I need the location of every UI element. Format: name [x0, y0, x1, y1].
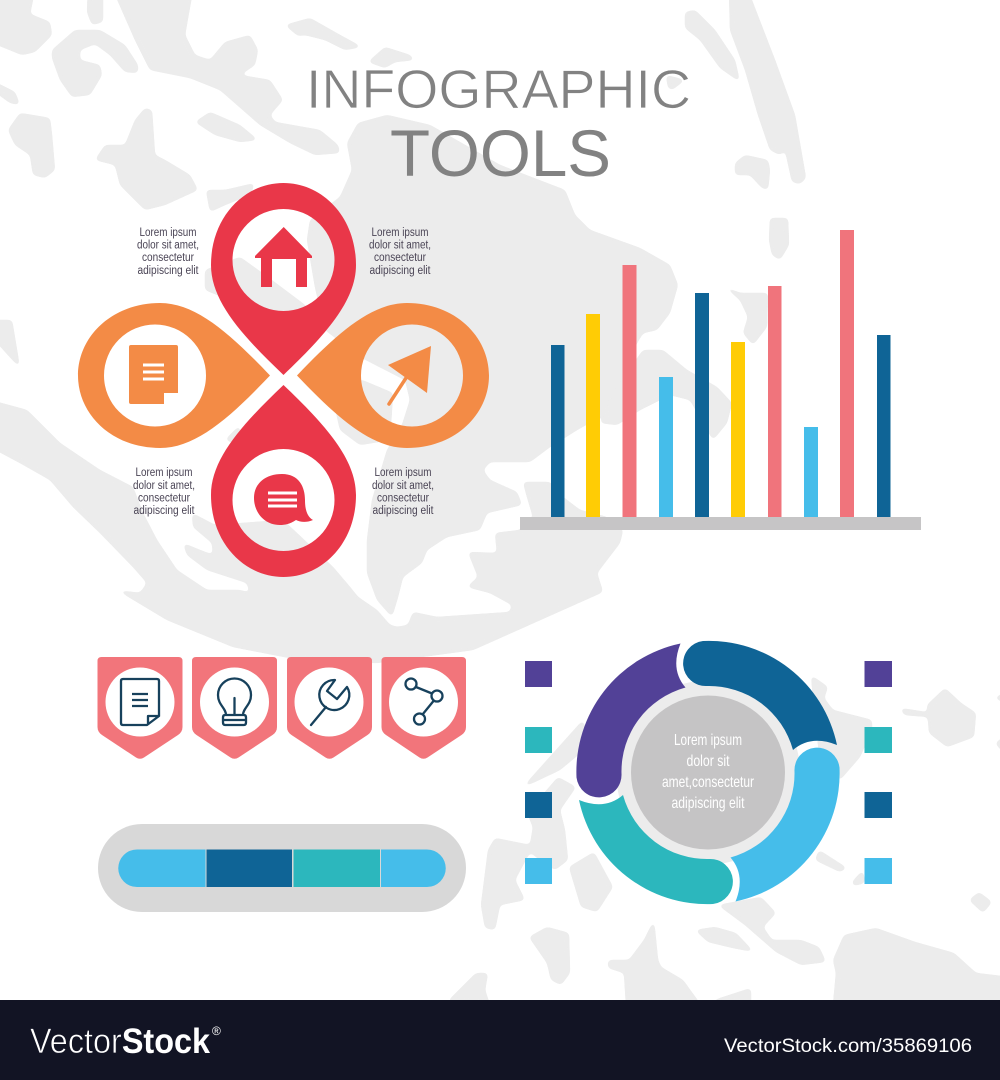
lobes behind pins: [205, 257, 320, 345]
globe lower band: [0, 400, 623, 663]
shield: document icon: [98, 657, 182, 759]
footer bar: [0, 1000, 1000, 1080]
text: bottom left: Lorem ipsum: [136, 467, 192, 479]
text: top left: dolor sit amet,: [137, 240, 199, 252]
center text: [662, 732, 754, 812]
text: bottom right: Lorem ipsum: [374, 467, 432, 479]
text: top left: adipiscing elit: [138, 265, 199, 277]
lobes behind bars: [600, 350, 732, 440]
pin: bottom red chat: [211, 385, 356, 577]
segment: teal: [579, 795, 733, 904]
text: top right: [369, 227, 431, 277]
pin: left orange document: [78, 303, 270, 448]
text: top right: dolor sit amet,: [369, 240, 431, 252]
footer id: VectorStock.com/35869106: [724, 1035, 972, 1057]
center text: adipiscing elit: [672, 795, 745, 812]
bar chart: [520, 230, 921, 530]
text: top left: Lorem ipsum: [140, 227, 196, 239]
text: bottom left: [133, 467, 195, 517]
segment: light blue: [730, 748, 840, 902]
text: bottom left: dolor sit amet,: [133, 480, 195, 492]
title: [306, 58, 691, 190]
registered mark: ®: [212, 1024, 221, 1038]
legend squares: right: [864, 661, 892, 884]
text: bottom right: dolor sit amet,: [372, 480, 434, 492]
text: bottom right: [372, 467, 434, 517]
title: TOOLS: [390, 116, 611, 190]
title: INFOGRAPHIC: [306, 58, 691, 120]
segment: purple: [576, 644, 686, 797]
donut diagram: [576, 641, 840, 904]
shield: light bulb icon: [192, 657, 277, 759]
shield: share nodes icon: [382, 657, 466, 759]
mainland: [307, 115, 678, 617]
text: top right: Lorem ipsum: [372, 227, 428, 239]
center text: Lorem ipsum: [674, 732, 742, 749]
pin: top red home: [211, 183, 356, 375]
center circle: [631, 696, 785, 850]
panel: shield icons: [98, 657, 466, 759]
center text: dolor sit: [686, 753, 730, 770]
lower map: [481, 777, 576, 930]
text: top left: [137, 227, 199, 277]
shield: wrench icon: [287, 657, 372, 759]
text: bottom left: adipiscing elit: [134, 505, 195, 517]
text: top right: adipiscing elit: [370, 265, 431, 277]
center text: amet,consectetur: [662, 774, 754, 791]
text: top right: consectetur: [374, 252, 426, 264]
panel: four pin diagram: [78, 183, 489, 577]
text: bottom right: consectetur: [377, 492, 429, 504]
text: bottom right: adipiscing elit: [372, 505, 434, 517]
pin: right orange arrow: [297, 303, 489, 448]
progress bar: [98, 824, 466, 912]
segment: dark blue: [683, 641, 837, 750]
footer logo: VectorStock: [30, 1022, 210, 1061]
text: top left: consectetur: [142, 252, 194, 264]
legend squares: left: [525, 661, 552, 884]
text: bottom left: consectetur: [138, 492, 190, 504]
